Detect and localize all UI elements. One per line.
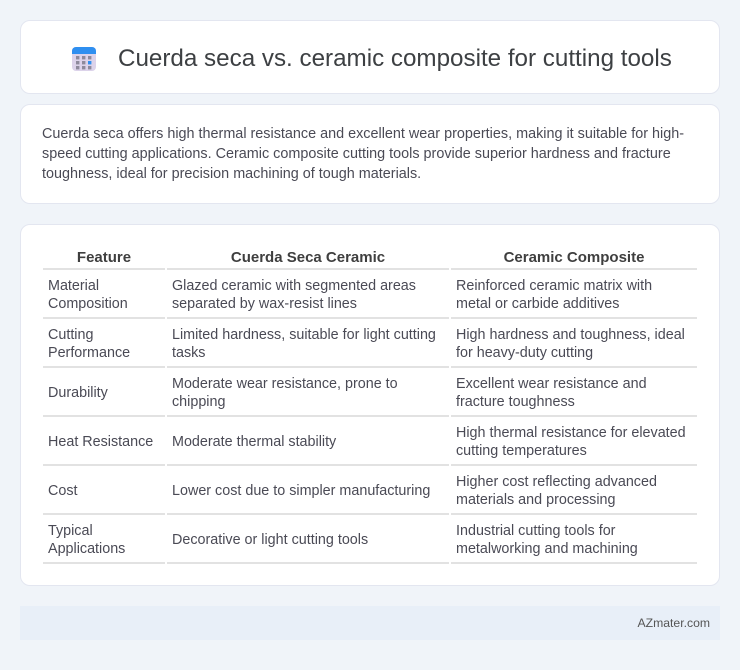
row: material composition: Composition	[48, 296, 128, 312]
row: durability: Moderate wear resistance, prone to	[172, 376, 398, 392]
summary text: Cuerda seca offers high thermal resistance and excellent wear properties, making it suitable for high-	[42, 126, 684, 142]
row: cutting performance: tasks	[172, 345, 205, 361]
row: cost: Cost	[48, 483, 78, 499]
row: durability: Durability	[48, 385, 108, 401]
row: material composition: Glazed ceramic with segmented areas	[172, 278, 416, 294]
footer bar	[20, 606, 720, 640]
row: heat resistance: High thermal resistance for elevated	[456, 425, 686, 441]
row: typical applications: Applications	[48, 541, 125, 557]
summary text: toughness, ideal for precision machining of tough materials.	[42, 166, 421, 182]
row: cutting performance: for heavy-duty cutting	[456, 345, 593, 361]
row: typical applications: metalworking and machining	[456, 541, 638, 557]
row: cost: materials and processing	[456, 492, 615, 508]
row: material composition: Material	[48, 278, 99, 294]
row: cutting performance: Cutting	[48, 327, 93, 343]
row: material composition: metal or carbide additives	[456, 296, 619, 312]
icon: calendar	[72, 47, 96, 71]
row: cutting performance: Limited hardness, suitable for light cutting	[172, 327, 436, 343]
row: durability: fracture toughness	[456, 394, 575, 410]
row: durability: Excellent wear resistance and	[456, 376, 647, 392]
row: heat resistance: Heat Resistance	[48, 434, 153, 450]
row: heat resistance: Moderate thermal stability	[172, 434, 336, 450]
row: cutting performance: Performance	[48, 345, 130, 361]
table card	[20, 224, 720, 586]
row: typical applications: Typical	[48, 523, 93, 539]
row: cost: Lower cost due to simpler manufacturing	[172, 483, 430, 499]
title card	[20, 20, 720, 94]
summary text	[42, 126, 684, 182]
row: durability: chipping	[172, 394, 225, 410]
summary card	[20, 104, 720, 204]
row: typical applications: Decorative or light cutting tools	[172, 532, 368, 548]
title: Cuerda seca vs. ceramic composite for cutting tools	[118, 45, 672, 72]
header: ceramic composite: Ceramic Composite	[504, 249, 644, 266]
row: typical applications: Industrial cutting tools for	[456, 523, 615, 539]
row: cutting performance: High hardness and toughness, ideal	[456, 327, 685, 343]
footer brand: AZmater.com	[638, 616, 710, 630]
header: cuerda seca ceramic: Cuerda Seca Ceramic	[231, 249, 385, 266]
summary text: speed cutting applications. Ceramic composite cutting tools provide superior hardness and fracture	[42, 146, 671, 162]
row: heat resistance: cutting temperatures	[456, 443, 587, 459]
header: feature: Feature	[77, 249, 131, 266]
row: cost: Higher cost reflecting advanced	[456, 474, 657, 490]
row: material composition: separated by wax-resist lines	[172, 296, 357, 312]
row: material composition: Reinforced ceramic matrix with	[456, 278, 652, 294]
